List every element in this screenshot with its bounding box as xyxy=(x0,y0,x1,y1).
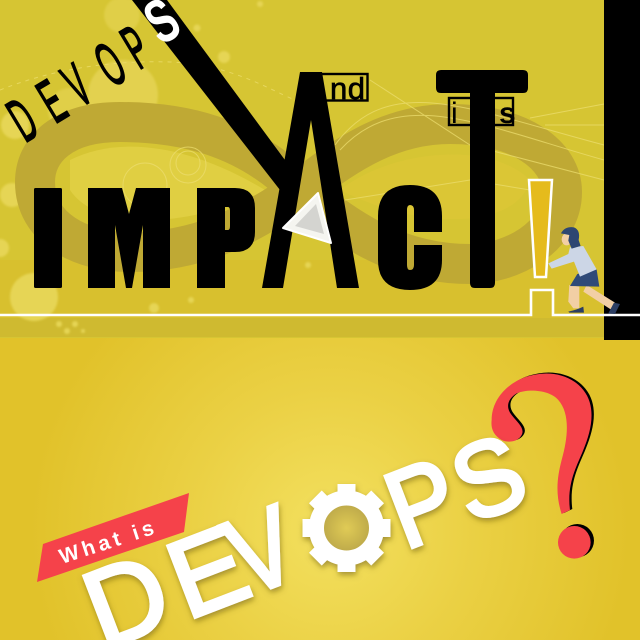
panel: impact banner xyxy=(0,0,604,338)
small label: its xyxy=(449,97,516,130)
title word: IMPACT xyxy=(34,70,528,290)
icon: gear xyxy=(284,466,409,590)
letter P: P xyxy=(370,434,475,573)
title word: DEVOP: P xyxy=(111,14,162,82)
legs xyxy=(568,285,579,308)
ribbon text: What is xyxy=(56,515,161,569)
question mark shadow xyxy=(494,372,594,557)
letter P xyxy=(197,188,255,288)
light network lines xyxy=(0,62,604,207)
infinity loop interior highlights xyxy=(70,147,265,220)
question mark body xyxy=(491,373,592,559)
letter T xyxy=(436,70,528,288)
question mark xyxy=(491,372,594,559)
letter A xyxy=(262,72,359,288)
panel: what is devops background xyxy=(0,336,640,640)
letter S: S xyxy=(436,410,541,545)
letter E: E xyxy=(152,501,264,640)
small label: its: s xyxy=(499,97,516,130)
shoes xyxy=(568,307,584,313)
exclamation mark xyxy=(529,180,552,277)
baseline with notch xyxy=(0,290,640,315)
title word: DEVOP: E xyxy=(27,68,78,136)
hair xyxy=(561,227,581,249)
head xyxy=(562,233,572,245)
title word: DEVOPS with gear xyxy=(68,410,541,640)
title word: DEVOP xyxy=(0,14,162,155)
letter V: V xyxy=(210,482,313,619)
small label: and: nd xyxy=(330,71,365,106)
letter I xyxy=(34,188,62,288)
woman pushing exclamation mark xyxy=(548,227,620,314)
ribbon: what is xyxy=(37,493,189,582)
letter M xyxy=(88,188,170,288)
diagonal bar of the letter A xyxy=(132,0,296,197)
letter C xyxy=(378,185,442,290)
skirt xyxy=(570,269,599,287)
small label: its: i xyxy=(451,97,458,130)
blouse xyxy=(548,246,597,277)
bubbles background xyxy=(0,0,311,334)
title word: DEVOP: O xyxy=(84,30,138,100)
infinity loop xyxy=(35,122,562,264)
right black bar xyxy=(604,0,640,340)
title word: DEVOP: V xyxy=(52,52,103,120)
triangle crossbar of A xyxy=(283,193,331,243)
